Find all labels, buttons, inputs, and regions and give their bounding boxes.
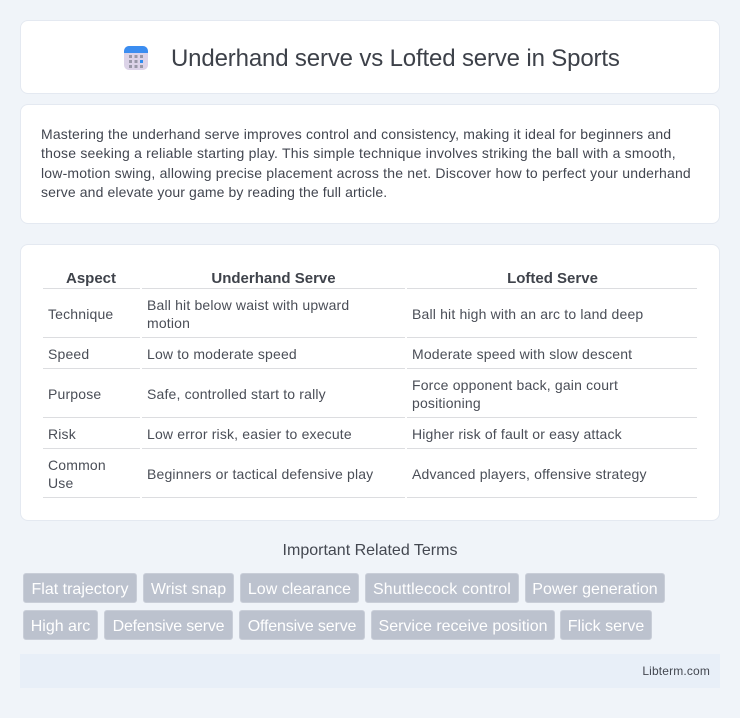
tag: Offensive serve xyxy=(248,618,356,635)
footer credit: Libterm.com xyxy=(642,664,710,678)
tag xyxy=(23,610,98,640)
tag: Shuttlecock control xyxy=(373,581,511,598)
row: purpose: positioning xyxy=(412,395,481,411)
text block: intro paragraph: low-motion swing, allowing precise placement across the net. Discover how to perfect your underhand xyxy=(41,165,691,181)
text block: intro paragraph: those seeking a reliable starting play. This simple technique involves striking the ball with a smooth, xyxy=(41,145,676,161)
tag: Low clearance xyxy=(248,581,351,598)
table header xyxy=(66,270,598,287)
row: common use: Use xyxy=(48,475,73,491)
tag: Flick serve xyxy=(568,618,644,635)
tag: High arc xyxy=(31,618,90,635)
tag xyxy=(143,573,234,603)
tag xyxy=(371,610,555,640)
tag group: related terms xyxy=(23,573,665,640)
row: speed xyxy=(48,346,632,362)
tag: Wrist snap xyxy=(151,581,226,598)
heading: important related terms: Important Related Terms xyxy=(283,542,457,559)
table header: Lofted Serve xyxy=(507,270,598,287)
text block: intro paragraph: Mastering the underhand serve improves control and consistency, making it ideal for beginners and xyxy=(41,126,671,142)
row: purpose: Safe, controlled start to rally xyxy=(147,386,326,402)
row: technique: Ball hit high with an arc to land deep xyxy=(412,306,643,322)
footer bar xyxy=(20,654,720,688)
panel: comparison table xyxy=(20,244,720,521)
tag: Flat trajectory xyxy=(32,581,128,598)
row: risk: Risk xyxy=(48,426,76,442)
row: common use xyxy=(48,457,647,491)
tag xyxy=(23,573,137,603)
row: purpose: Purpose xyxy=(48,386,101,402)
row: technique: motion xyxy=(147,315,190,331)
row: common use: Common xyxy=(48,457,106,473)
row: technique: Ball hit below waist with upward xyxy=(147,297,349,313)
row: risk xyxy=(48,426,622,442)
row: technique xyxy=(48,297,643,331)
tag xyxy=(525,573,665,603)
panel: title header xyxy=(20,20,720,94)
title: Underhand serve vs Lofted serve in Sports xyxy=(171,45,620,72)
tag: Defensive serve xyxy=(113,618,224,635)
row: speed: Moderate speed with slow descent xyxy=(412,346,632,362)
tag xyxy=(560,610,652,640)
row: common use: Advanced players, offensive strategy xyxy=(412,466,647,482)
icon: calendar xyxy=(124,46,148,70)
tag xyxy=(239,610,365,640)
text block: intro paragraph: serve and elevate your game by reading the full article. xyxy=(41,184,387,200)
row: purpose: Force opponent back, gain court xyxy=(412,377,618,393)
tag xyxy=(104,610,233,640)
tag xyxy=(365,573,519,603)
table header: Underhand Serve xyxy=(211,270,336,287)
row: risk: Low error risk, easier to execute xyxy=(147,426,352,442)
table header: Aspect xyxy=(66,270,116,287)
text block: intro paragraph xyxy=(41,126,691,200)
panel: introduction xyxy=(20,104,720,224)
row: speed: Low to moderate speed xyxy=(147,346,297,362)
row: risk: Higher risk of fault or easy attack xyxy=(412,426,622,442)
tag: Power generation xyxy=(532,581,658,598)
tag xyxy=(240,573,359,603)
row: purpose xyxy=(48,377,618,411)
row: common use: Beginners or tactical defensive play xyxy=(147,466,373,482)
tag: Service receive position xyxy=(379,618,547,635)
row: technique: Technique xyxy=(48,306,113,322)
row: speed: Speed xyxy=(48,346,89,362)
